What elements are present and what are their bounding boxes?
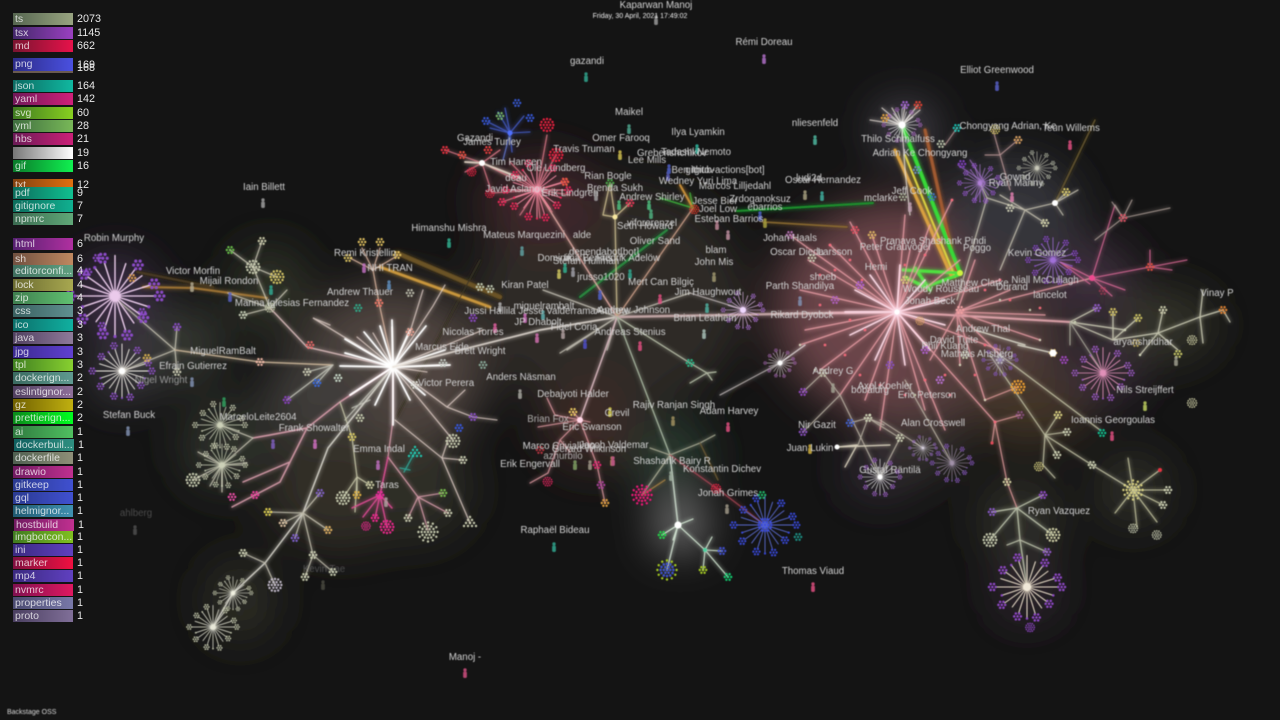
contributor names: Peter Grauvogel <box>860 242 930 253</box>
legend row: sh: 6 <box>77 253 83 265</box>
legend row: ini: 1 <box>77 544 83 556</box>
legend row: ico: 3 <box>77 319 83 331</box>
contributor names: Juan Lukin <box>787 443 833 454</box>
legend row: dockerignore: dockerign... <box>15 372 69 384</box>
legend row: tpl: 3 <box>77 359 83 371</box>
legend row: sh <box>13 253 83 265</box>
contributor names: Jacob Valdemar <box>579 440 649 451</box>
contributor names: Ima Bennis <box>564 253 612 264</box>
contributor names: Shashank Bairy R <box>633 456 711 467</box>
contributor names: Wedney Yuri Lima <box>659 176 738 187</box>
legend row: md: md <box>15 40 30 52</box>
contributor names: Ioannis Georgoulas <box>1071 415 1155 426</box>
legend row: png <box>13 58 95 71</box>
legend row: ai: ai <box>15 426 23 438</box>
legend row: marker: 1 <box>77 557 83 569</box>
contributor names: Johan Haals <box>763 233 817 244</box>
legend row: nvmrc: 1 <box>77 584 83 596</box>
contributor names: Teun Willems <box>1042 123 1100 134</box>
legend row: yml: yml <box>15 120 31 132</box>
contributor names: Iain Billett <box>243 182 285 193</box>
small pink hub clusters <box>577 417 583 423</box>
legend row: hidden brown <box>13 62 95 74</box>
project title: Backstage OSS <box>7 709 57 716</box>
legend row: jpg: jpg <box>15 346 29 358</box>
contributor names: mclarke <box>864 193 898 204</box>
legend row: marker: marker <box>15 557 48 569</box>
right hub dots <box>856 281 864 289</box>
contributor names: Marco Criviallaro <box>523 441 595 452</box>
contributor names: Andrew Thal <box>956 324 1010 335</box>
contributor names: Omer Farooq <box>592 133 650 144</box>
legend row: html: 6 <box>77 238 83 250</box>
contributor names: Gownd <box>1000 172 1030 183</box>
contributor names: Marcos Lilljedahl <box>699 181 771 192</box>
contributor names: Rian Bogle <box>584 171 632 182</box>
green hub clusters <box>631 484 653 506</box>
legend row: tpl <box>13 359 83 371</box>
contributor names: Oliver Sand <box>630 236 680 247</box>
upper right star <box>881 107 923 143</box>
contributor names: Thilo Schmalfuss <box>861 134 935 145</box>
legend row: hbs <box>13 133 89 145</box>
legend row: dockerignore: 2 <box>77 372 83 384</box>
contributor names: Jonah Beck <box>905 296 955 307</box>
legend row: prettierignore: 2 <box>77 412 83 424</box>
upper left clusters <box>245 260 261 274</box>
legend row: drawio <box>13 466 83 478</box>
legend row: properties: 1 <box>77 596 83 608</box>
contributor names: Eric Swanson <box>562 422 622 433</box>
legend row: gz <box>13 399 83 411</box>
contributor names: Eric Peterson <box>898 390 956 401</box>
legend row: proto: proto <box>15 610 39 622</box>
contributor names: Thomas Viaud <box>782 566 844 577</box>
contributor names: MarceloLeite2604 <box>219 412 297 423</box>
contributor names: Niall McCullagh <box>1011 275 1079 286</box>
legend row: zip: 4 <box>77 292 83 304</box>
contributor names: Anders Näsman <box>486 372 556 383</box>
legend row: ts: 2073 <box>77 13 101 25</box>
hub: white starburst left <box>340 320 450 425</box>
legend row: hidden brown: 168 <box>77 62 95 74</box>
contributor names: Ryan Manny <box>989 178 1043 189</box>
legend row: unnamed <box>13 147 89 159</box>
contributor names: Woody Rousseau <box>903 284 979 295</box>
contributor names: Travis Truman <box>553 144 615 155</box>
contributor names: Chongyang Adrian, Ke <box>960 121 1056 132</box>
legend row: pdf <box>13 187 83 199</box>
contributor names: Mijail Rondon <box>200 276 258 287</box>
legend row: prettierignore: prettierign... <box>15 412 70 424</box>
contributor names: Maikel <box>615 107 643 118</box>
contributor names: Nigel Wright <box>135 375 188 386</box>
tree: central hub branches <box>393 183 830 455</box>
file extension legend <box>13 13 101 622</box>
date stamp: Friday, 30 April, 2021 17:49:02 <box>593 13 688 20</box>
contributor names: bobaldrg <box>851 385 889 396</box>
tree: upper middle red cluster <box>445 108 570 218</box>
legend row: yaml: 142 <box>77 93 95 105</box>
contributor names: Stefan Buck <box>103 410 155 421</box>
legend row: sh: sh <box>15 253 26 265</box>
contributor names: Nils Streijffert <box>1116 385 1174 396</box>
contributor names: Jesse Valderrama <box>518 306 596 317</box>
contributor names: Mert Can Bilgiç <box>628 277 694 288</box>
legend row: lock <box>13 279 83 291</box>
contributor names: dependabot[bot] <box>569 247 639 258</box>
legend row: ini <box>13 544 103 556</box>
contributor names: Marcus Eide <box>415 342 469 353</box>
legend row: dockerfile: 1 <box>77 452 83 464</box>
legend row: unnamed: 19 <box>77 147 89 159</box>
contributor names: Matthew Clarke <box>941 278 1009 289</box>
contributor names: Rémi Doreau <box>735 37 793 48</box>
contributor names: Parth Shandilya <box>766 281 835 292</box>
tree: right side pink spokes <box>690 105 1230 587</box>
upper middle clusters <box>501 160 573 221</box>
legend row: ts <box>13 13 101 25</box>
contributor names: Lee Mills <box>628 155 666 166</box>
legend row: gif <box>13 160 89 172</box>
legend row: npmrc: 7 <box>77 213 83 225</box>
legend row: ai <box>13 426 83 438</box>
contributor avatars <box>126 15 1178 678</box>
legend row: txt: txt <box>15 179 26 191</box>
contributor names: Erik Engervall <box>500 459 560 470</box>
legend row: gitignore: gitignore <box>15 200 55 212</box>
legend row: svg: svg <box>15 107 31 119</box>
action beams <box>137 120 1095 420</box>
legend row: json <box>13 80 95 92</box>
contributor names: Brenda Sukh <box>587 183 643 194</box>
right clusters <box>1025 236 1081 285</box>
legend row: jpg <box>13 346 83 358</box>
contributor names: Frank Showalter <box>279 423 350 434</box>
lower right clusters <box>1003 478 1011 486</box>
legend row: gitkeep: 1 <box>77 478 83 490</box>
legend row: gql <box>13 492 83 504</box>
contributor names: Crevil <box>605 408 629 419</box>
legend row: lock: lock <box>15 279 34 291</box>
legend row: pdf: 9 <box>77 187 83 199</box>
contributor names: Adrian Ke Chongyang <box>873 148 967 159</box>
legend row: java <box>13 332 83 344</box>
contributor names: ahlberg <box>120 508 152 519</box>
contributor names: Brett Wright <box>455 346 506 357</box>
contributor names: Vinay P <box>1200 288 1234 299</box>
legend row: yml <box>13 120 89 132</box>
contributor names: Konstantin Dichev <box>683 464 761 475</box>
contributor names: github-actions[bot] <box>685 165 765 176</box>
contributor names: Andreas Stenius <box>594 327 666 338</box>
legend row: tsx <box>13 26 100 39</box>
contributor names: Brian Leathem <box>673 313 737 324</box>
lower left star <box>88 342 156 401</box>
contributor names: Himanshu Mishra <box>411 223 487 234</box>
contributor names: Hemi <box>865 262 887 273</box>
contributor names: Ben Igitov <box>671 165 715 176</box>
legend row: npmrc: npmrc <box>15 213 44 225</box>
branch end nodes on the right hub <box>800 200 1140 422</box>
contributor names: Remi Kristellin <box>334 248 396 259</box>
contributor names: Andrew Shirley <box>619 192 685 203</box>
glow haze behind the trees <box>77 102 1215 640</box>
contributor names: Victor Morfin <box>166 266 220 277</box>
contributor names: viforerenzel <box>627 218 677 229</box>
contributor names: Mathias Ahsberg <box>941 349 1013 360</box>
legend row: lock: 4 <box>77 279 83 291</box>
legend row: marker <box>13 557 103 569</box>
contributor names: Axel Koehler <box>858 381 913 392</box>
contributor names: alde <box>573 230 591 241</box>
contributor names: lancelot <box>1033 290 1067 301</box>
contributor names: gazandi <box>570 56 604 67</box>
contributor names: aryanshridhar <box>1113 337 1173 348</box>
contributor names: John Mis <box>695 257 734 268</box>
contributor names: Stefan Hullman <box>553 256 619 267</box>
contributor names: Marina Iglesias Fernandez <box>235 298 349 309</box>
legend row: yml: 28 <box>77 120 89 132</box>
contributor names: Ole Lundberg <box>527 163 585 174</box>
legend row: gql: 1 <box>77 492 83 504</box>
contributor names: David Tuite <box>930 335 978 346</box>
legend row: pdf: pdf <box>15 187 30 199</box>
legend row: ico <box>13 319 83 331</box>
legend row: editorconfig: editorconfi... <box>15 265 72 277</box>
legend row: imgbotconfig: 1 <box>77 531 83 543</box>
legend row: zip: zip <box>15 292 28 304</box>
contributor names: Jeff Cook <box>892 186 933 197</box>
contributor names: Kiran Patel <box>501 280 549 291</box>
contributor names: Pranava Shashank Pindi <box>880 236 986 247</box>
contributor names: Zrdoganoksuz <box>729 194 791 205</box>
legend row: md <box>13 40 95 52</box>
contributor names: Dominik <box>538 253 573 264</box>
legend row: hbs: 21 <box>77 133 89 145</box>
contributor names: Alan Crosswell <box>901 418 965 429</box>
legend row: gif: 16 <box>77 160 89 172</box>
contributor names: Gerard Wilkinson <box>552 444 626 455</box>
legend row: dockerbuild: 1 <box>78 439 84 451</box>
contributor names: Oscar Dieda <box>770 247 825 258</box>
legend row: hostbuild: hostbuild <box>16 519 58 531</box>
legend row: json: json <box>15 80 34 92</box>
legend row: ico: ico <box>15 319 28 331</box>
contributor names: Jesse Bier <box>692 196 738 207</box>
legend row: properties <box>13 596 103 608</box>
legend row: html <box>13 238 83 250</box>
contributor names: Joel Low <box>699 204 738 215</box>
contributor names: Rikard Dyobck <box>770 310 834 321</box>
contributor names: Grebenshchikov <box>637 148 707 159</box>
legend row: helmignore: helmignor... <box>15 505 69 517</box>
contributor names: Andrey G <box>813 366 853 377</box>
legend row: nvmrc <box>13 584 103 596</box>
contributor names: Javid Aslanov <box>485 184 545 195</box>
legend row: css: 3 <box>77 305 83 317</box>
legend row: svg: 60 <box>77 107 89 119</box>
contributor names: Jonah Grimes <box>698 488 758 499</box>
legend row: imgbotconfig: imgbotcon... <box>15 531 72 543</box>
contributor names: Brian Fox <box>527 414 569 425</box>
legend row: hbs: hbs <box>15 133 32 145</box>
contributor names: James Turley <box>463 137 521 148</box>
contributor names: Esteban Barrios <box>695 214 764 225</box>
contributor names: Tadashi Nemoto <box>661 147 731 158</box>
legend row: txt: 12 <box>77 179 89 191</box>
contributor names: Nir Gazit <box>798 420 836 431</box>
contributor names: Robin Murphy <box>84 233 144 244</box>
legend row: mp4 <box>13 570 103 582</box>
legend row: dockerfile: dockerfile <box>15 452 60 464</box>
contributor names: Victor Perera <box>418 378 475 389</box>
legend row: java: 3 <box>77 332 83 344</box>
contributor names: Ilya Lyamkin <box>671 127 725 138</box>
legend row: txt <box>13 179 89 191</box>
contributor names: azhurbilo <box>543 451 583 462</box>
contributor names: Taras <box>375 480 399 491</box>
contributor names: blam <box>706 245 726 256</box>
legend row: helmignore: 1 <box>77 505 83 517</box>
contributor names: NHI TRAN <box>367 263 413 274</box>
legend row: hostbuild: 1 <box>78 519 84 531</box>
contributor names: Raphaël Bideau <box>521 525 589 536</box>
legend row: editorconfig: 4 <box>77 265 83 277</box>
contributor names: Larsson <box>818 247 852 258</box>
legend row: npmrc <box>13 213 83 225</box>
contributor names: Gazandi <box>457 133 493 144</box>
contributor names: Fidel Coria <box>551 322 598 333</box>
contributor names: Oscar Hernandez <box>785 175 861 186</box>
hub: right pink burst <box>845 265 945 365</box>
legend row: css <box>13 305 83 317</box>
contributor names: Andrew <box>596 306 629 317</box>
legend row: drawio: 1 <box>77 466 83 478</box>
legend row: yaml: yaml <box>15 93 37 105</box>
blue star <box>729 495 801 556</box>
contributor names: Jussi Hallila <box>464 306 516 317</box>
legend row: json: 164 <box>77 80 95 92</box>
legend row: gitignore: 7 <box>77 200 83 212</box>
contributor names: Andrew Thauer <box>327 287 394 298</box>
legend row: eslintignore: eslintignor... <box>15 386 71 398</box>
legend row: hostbuild <box>14 519 84 531</box>
contributor names: ebarrios <box>748 202 783 213</box>
lower left clusters <box>192 401 248 450</box>
legend row: png: 169 <box>77 59 95 71</box>
contributor names: Fredrik Adelöw <box>596 253 661 264</box>
contributor names: Kevin Tae <box>303 564 345 575</box>
legend row: tsx: 1145 <box>77 26 100 38</box>
contributor names: nliesenfeld <box>792 118 838 129</box>
legend row: tsx: tsx <box>15 26 28 38</box>
contributor names: Seth Howard <box>617 221 673 232</box>
legend row: gql: gql <box>15 492 29 504</box>
contributor names: deau <box>505 173 527 184</box>
contributor names: Kaparwan Manoj <box>620 0 692 11</box>
legend row: mp4: 1 <box>77 570 83 582</box>
legend row: gitkeep: gitkeep <box>15 478 49 490</box>
legend row: html: html <box>15 238 35 250</box>
legend row: java: java <box>15 332 34 344</box>
contributor names: Mateus Marquezini <box>483 230 565 241</box>
legend row: png: png <box>15 58 33 70</box>
left purple star <box>65 253 165 341</box>
legend row: proto <box>13 610 103 622</box>
contributor names: Erik Lindgren <box>541 188 599 199</box>
legend row: gitignore <box>13 200 83 212</box>
legend row: jpg: 3 <box>77 346 83 358</box>
legend row: gz: gz <box>15 399 26 411</box>
legend row: svg <box>13 107 89 119</box>
contributor names: miguelrambalt <box>514 301 575 312</box>
contributor names: Tim Hansen <box>490 157 542 168</box>
contributor names: Debajyoti Halder <box>537 389 610 400</box>
legend row: yaml <box>13 93 95 105</box>
legend row: ai: 1 <box>77 426 83 438</box>
contributor names: jrusso1020 <box>576 272 625 283</box>
contributor names: Poggo <box>963 243 991 254</box>
legend row: zip <box>13 292 83 304</box>
contributor names: Phil Kuang <box>922 341 968 352</box>
legend row: drawio: drawio <box>15 466 46 478</box>
tree: small pink and green hubs <box>530 398 765 577</box>
contributor names: Adam Harvey <box>700 406 758 417</box>
contributor names: MiguelRamBalt <box>190 346 256 357</box>
contributor names: JP Dhabolt <box>514 317 562 328</box>
tree: left side branches <box>115 241 497 627</box>
legend row: mp4: mp4 <box>15 570 35 582</box>
contributor names: shoeb <box>810 272 836 283</box>
legend row: eslintignore: 2 <box>77 386 83 398</box>
contributor names: Andrew Johnson <box>598 305 670 316</box>
bottom purple stars <box>858 458 902 497</box>
legend row: gitkeep <box>13 478 83 491</box>
legend row: properties: properties <box>15 596 62 608</box>
contributor names: Gustaf Räntilä <box>859 465 921 476</box>
contributor names: Emma Indal <box>353 444 405 455</box>
contributor names: Elliot Greenwood <box>960 65 1034 76</box>
legend row: gz: 2 <box>77 399 83 411</box>
contributor names: Rajiv Ranjan Singh <box>633 400 715 411</box>
legend row: tpl: tpl <box>15 359 26 371</box>
legend row: dockerbuild: dockerbuil... <box>16 439 73 451</box>
contributor names: Nicolas Torres <box>442 327 504 338</box>
contributor names: Efrain Gutierrez <box>159 361 227 372</box>
legend row: dockerfile <box>13 452 83 464</box>
contributor names: ludi2d <box>796 173 822 184</box>
contributor names: Jim Haughwout <box>675 287 742 298</box>
legend row: md: 662 <box>77 40 95 52</box>
contributor names: Manoj - <box>449 652 481 663</box>
legend row: css: css <box>15 305 31 317</box>
legend row: nvmrc: nvmrc <box>15 584 44 596</box>
legend row: gif: gif <box>15 160 26 172</box>
middle small clusters <box>721 291 765 330</box>
legend row: proto: 1 <box>77 610 83 622</box>
legend row: ts: ts <box>15 13 23 25</box>
contributor names: Ryan Vazquez <box>1028 506 1090 517</box>
legend row: ini: ini <box>15 544 26 556</box>
contributor names: Kevin Gomez <box>1008 248 1066 259</box>
file clusters <box>65 99 1227 651</box>
contributor names: Durand <box>996 282 1028 293</box>
